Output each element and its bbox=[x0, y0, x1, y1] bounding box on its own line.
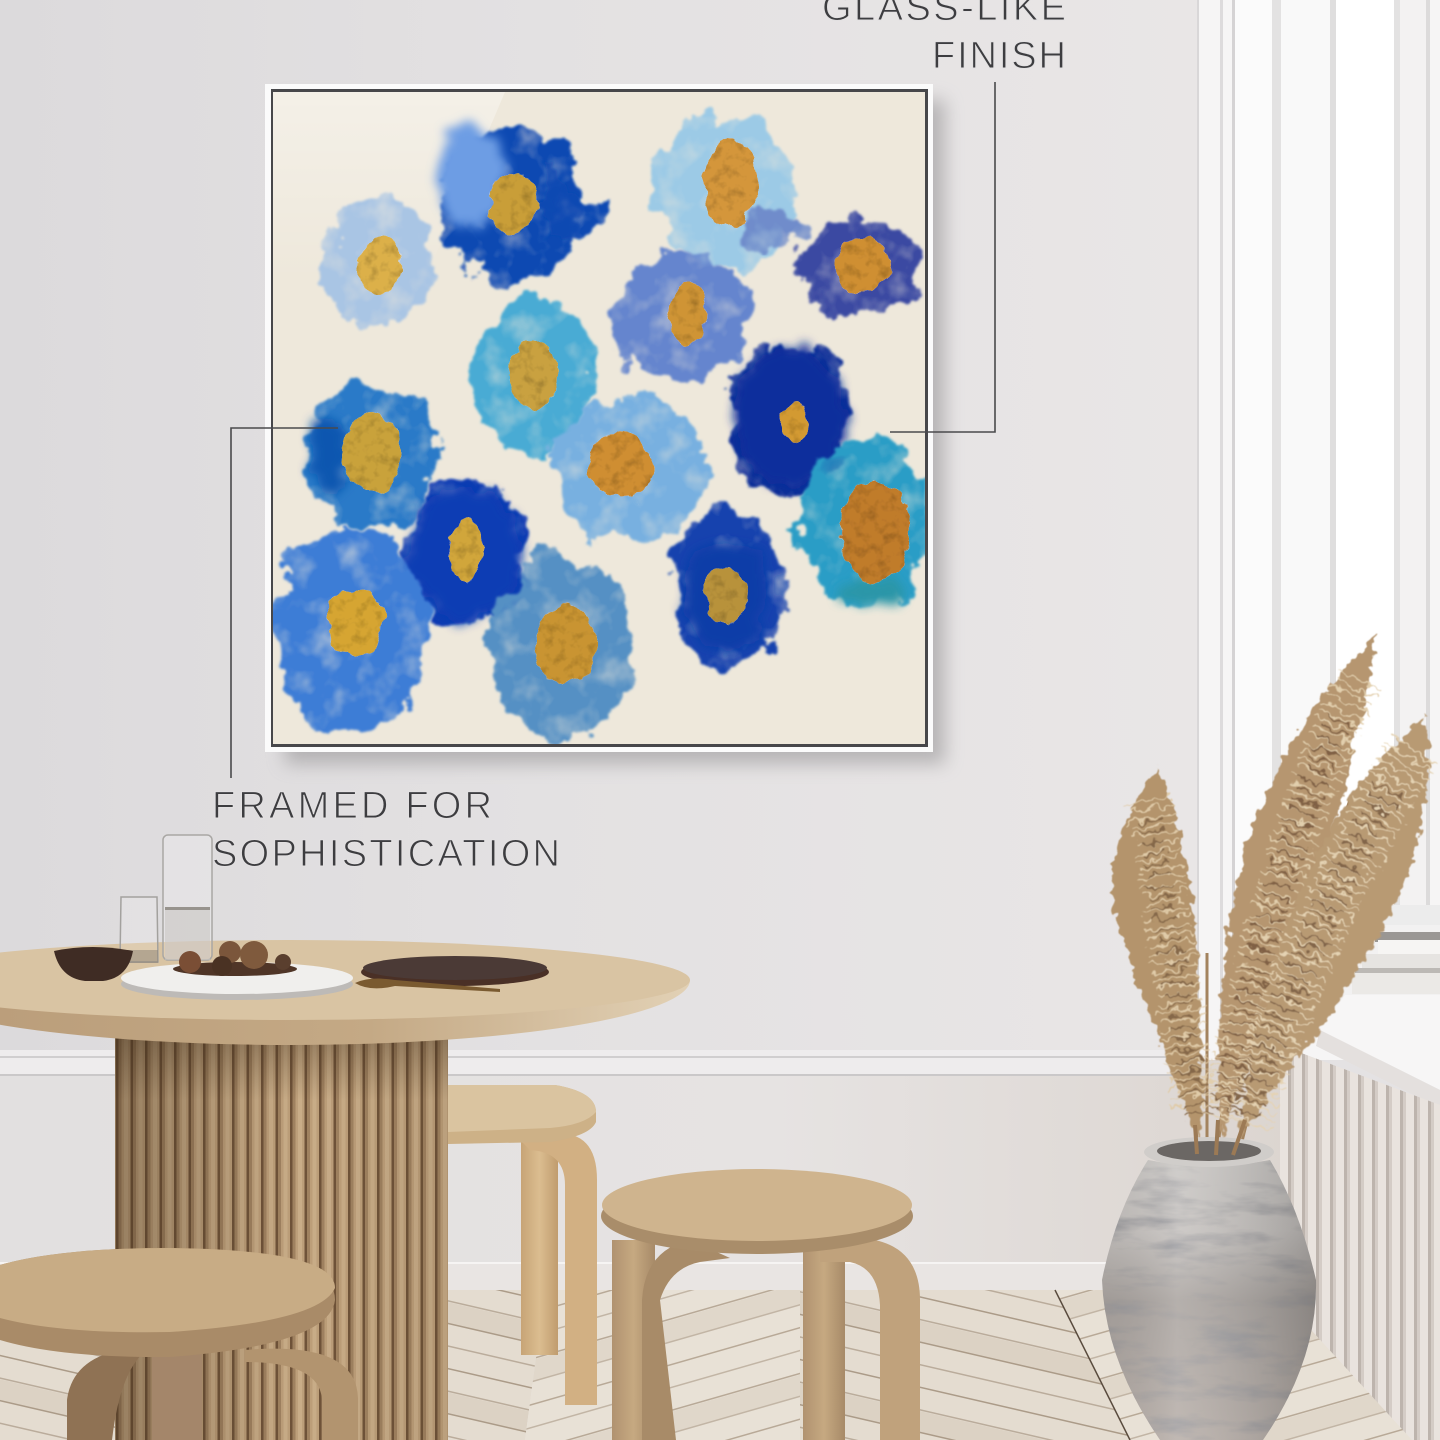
spoon bbox=[355, 979, 500, 992]
flower 5 bbox=[614, 252, 750, 384]
lower wall bbox=[0, 1060, 1290, 1300]
flower 10 bbox=[799, 439, 931, 611]
flower 2 bbox=[438, 123, 610, 285]
books on window sill bbox=[1352, 932, 1440, 994]
drinking glass bbox=[120, 897, 158, 963]
dark bowl bbox=[54, 947, 133, 981]
canvas bbox=[273, 92, 925, 744]
flower 12 bbox=[669, 512, 785, 668]
wainscot rail bbox=[0, 1050, 1180, 1076]
dark inner edge bbox=[271, 89, 928, 747]
table pedestal bbox=[115, 1030, 448, 1440]
front stool bbox=[601, 1169, 920, 1440]
table top bbox=[0, 940, 690, 1045]
flower 4 bbox=[796, 215, 920, 315]
wall background bbox=[0, 0, 1200, 1060]
frame shadow bbox=[285, 100, 945, 764]
marble plate with nuts bbox=[121, 941, 353, 1000]
label: framed for sophistication: SOPHISTICATION bbox=[212, 833, 560, 875]
plume left bbox=[1112, 767, 1202, 1140]
framed painting bbox=[265, 84, 945, 764]
radiator bbox=[1280, 1045, 1440, 1440]
grass stems bbox=[1160, 800, 1350, 1150]
label: glass-like finish: FINISH bbox=[932, 35, 1066, 77]
flower 14 bbox=[488, 553, 632, 737]
flower 6 bbox=[475, 295, 591, 455]
plume tall bbox=[1218, 633, 1377, 1140]
ceramic vase bbox=[1102, 1120, 1316, 1440]
pampas grass bbox=[1112, 633, 1429, 1150]
flowers group bbox=[272, 92, 931, 737]
callout line: glass-like finish bbox=[890, 82, 995, 432]
flower 9 bbox=[552, 396, 704, 544]
label: framed for sophistication: FRAMED FOR bbox=[212, 785, 492, 827]
wooden plate bbox=[361, 956, 549, 986]
window sill bbox=[1316, 995, 1440, 1108]
flower 8 bbox=[306, 381, 438, 529]
white frame bbox=[265, 84, 933, 752]
flower 1 bbox=[323, 198, 433, 328]
stems entering vase bbox=[1195, 1120, 1245, 1155]
baseboard bbox=[0, 1262, 1290, 1290]
back stool bbox=[448, 1085, 597, 1405]
left stool bbox=[0, 1248, 358, 1440]
carafe bbox=[163, 835, 212, 960]
plume right bbox=[1238, 717, 1429, 1140]
callout line: framed for sophistication bbox=[231, 428, 338, 778]
window and white moldings bbox=[1197, 0, 1440, 1060]
herringbone floor bbox=[0, 1290, 1420, 1440]
flower 7 bbox=[728, 342, 852, 494]
glare on glass bbox=[273, 92, 505, 153]
flower 13 bbox=[272, 528, 428, 732]
flower 3 bbox=[657, 112, 802, 268]
flower 11 bbox=[405, 480, 525, 624]
